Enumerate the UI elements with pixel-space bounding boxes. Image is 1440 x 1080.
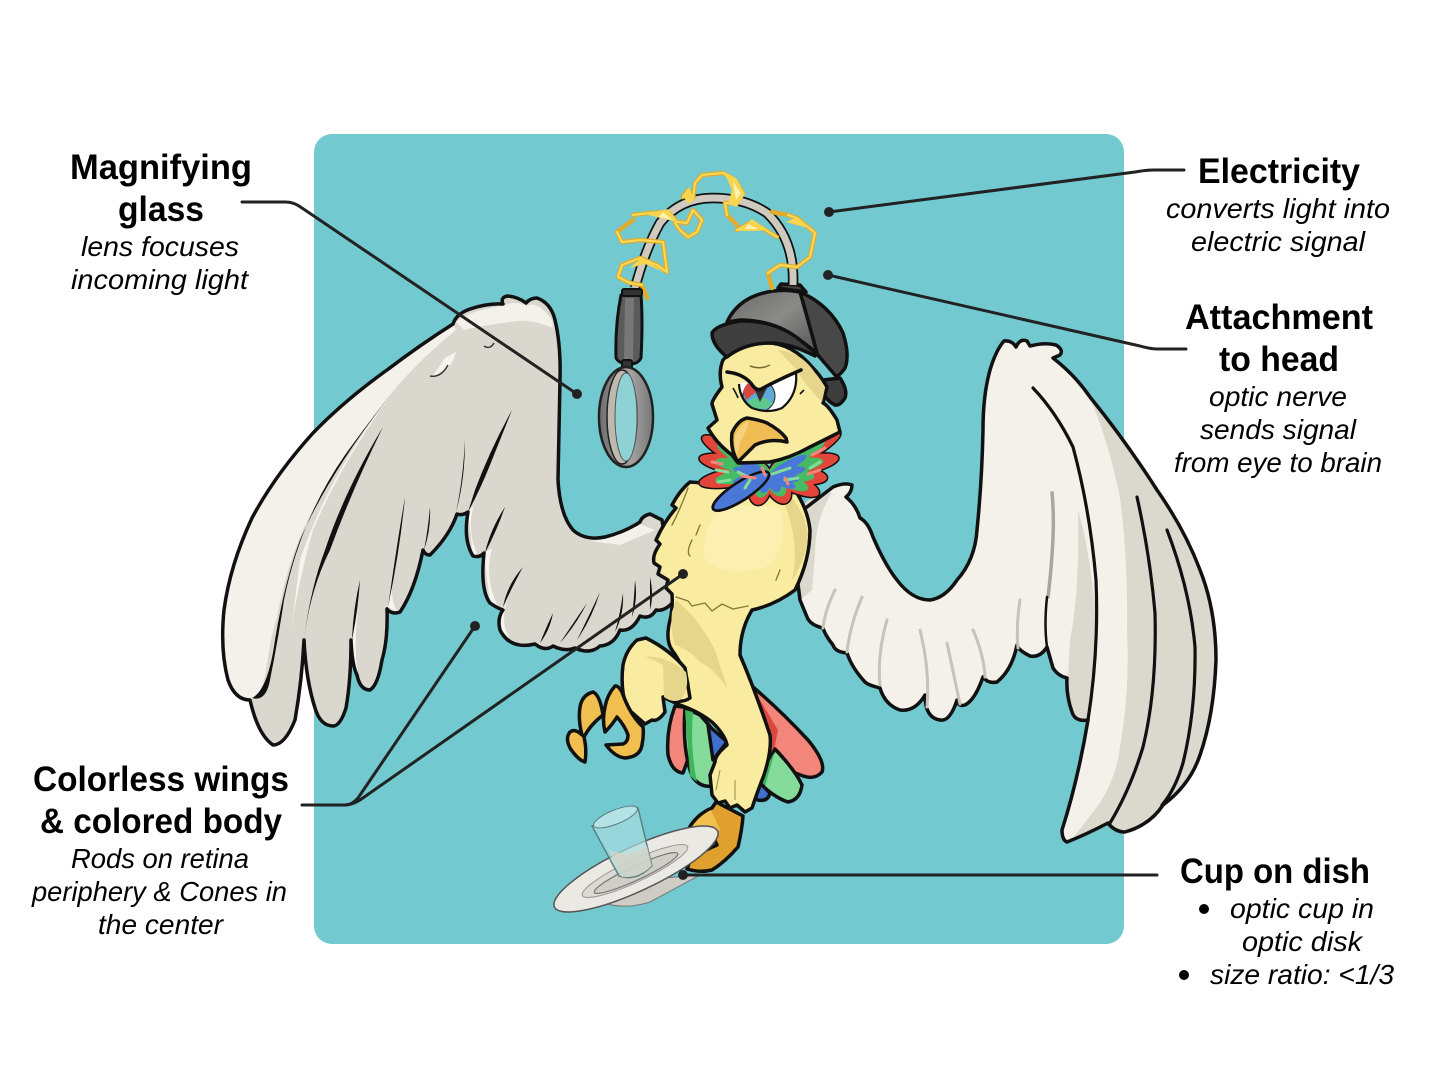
body fur marks xyxy=(672,488,780,611)
label: attachment to head: optic nerve xyxy=(1209,381,1347,412)
leader lines: wings and body xyxy=(302,569,688,805)
label: colorless wings and colored body: periphery & Cones in xyxy=(31,876,287,907)
label: attachment to head: sends signal xyxy=(1200,414,1357,445)
leader line: cup on dish xyxy=(678,870,1157,880)
label: colorless wings and colored body: & colored body xyxy=(40,802,282,841)
leader line: magnifying glass xyxy=(242,202,582,399)
raised thigh xyxy=(622,638,690,724)
label: cup on dish: Cup on dish xyxy=(1180,852,1370,891)
label: colorless wings and colored body: Rods on retina xyxy=(71,843,249,874)
body and leg xyxy=(654,482,810,812)
leader line: electricity xyxy=(824,170,1184,217)
label: cup on dish xyxy=(1179,852,1394,990)
label: colorless wings and colored body: the center xyxy=(98,909,225,940)
leader line: attachment xyxy=(823,270,1186,349)
wing shoulder highlight xyxy=(456,303,553,330)
label: magnifying glass: lens focuses xyxy=(81,231,239,262)
label: colorless wings and colored body xyxy=(31,760,289,940)
label: attachment to head xyxy=(1174,298,1382,478)
label: electricity xyxy=(1166,152,1390,257)
label: cup on dish: optic disk xyxy=(1242,926,1364,957)
panel: teal background xyxy=(314,134,1124,944)
label: attachment to head: from eye to brain xyxy=(1174,447,1382,478)
thigh shading xyxy=(645,657,687,701)
label: electricity: Electricity xyxy=(1198,152,1361,191)
infographic canvas xyxy=(31,134,1394,984)
label: colorless wings and colored body: Colorless wings xyxy=(33,760,289,799)
magnifying glass xyxy=(599,289,653,467)
beak xyxy=(732,418,787,462)
wing feather highlights xyxy=(290,352,510,688)
brow crease xyxy=(750,365,770,368)
cyclops eye with RGB iris xyxy=(727,370,804,412)
back flap of cap xyxy=(823,378,846,405)
label: electricity: converts light into xyxy=(1166,193,1390,224)
left colorless wing xyxy=(223,296,675,745)
right wing shaded feathers xyxy=(1070,398,1216,842)
right wing outline xyxy=(790,340,1216,842)
collar of colored feathers xyxy=(698,425,844,517)
electricity bolts xyxy=(617,172,815,298)
wire arc xyxy=(635,198,793,288)
wing feather separations xyxy=(252,383,652,699)
label: cup on dish: size ratio: <1/3 xyxy=(1210,959,1394,990)
label: attachment to head: Attachment xyxy=(1185,298,1373,337)
body shading xyxy=(671,600,728,690)
label: magnifying glass: glass xyxy=(118,190,204,229)
head xyxy=(708,343,840,463)
tail feathers xyxy=(668,687,823,802)
cap xyxy=(712,284,847,376)
wing outline xyxy=(223,296,675,745)
label: magnifying glass xyxy=(70,148,252,295)
dish xyxy=(545,811,727,927)
head shading xyxy=(778,350,825,402)
label: attachment to head: to head xyxy=(1219,340,1339,379)
label: magnifying glass: incoming light xyxy=(71,264,249,295)
right colorless wing xyxy=(790,340,1216,842)
raised foot with claws xyxy=(568,686,643,762)
label: electricity: electric signal xyxy=(1191,226,1366,257)
illustration: bird xyxy=(223,172,1216,927)
label: magnifying glass: Magnifying xyxy=(70,148,252,187)
lower leg gripping dish xyxy=(687,802,743,871)
label: cup on dish: optic cup in xyxy=(1230,893,1374,924)
glass cup xyxy=(591,802,652,878)
wing leading feather highlight xyxy=(223,324,456,700)
right wing feather lines xyxy=(1033,388,1097,720)
